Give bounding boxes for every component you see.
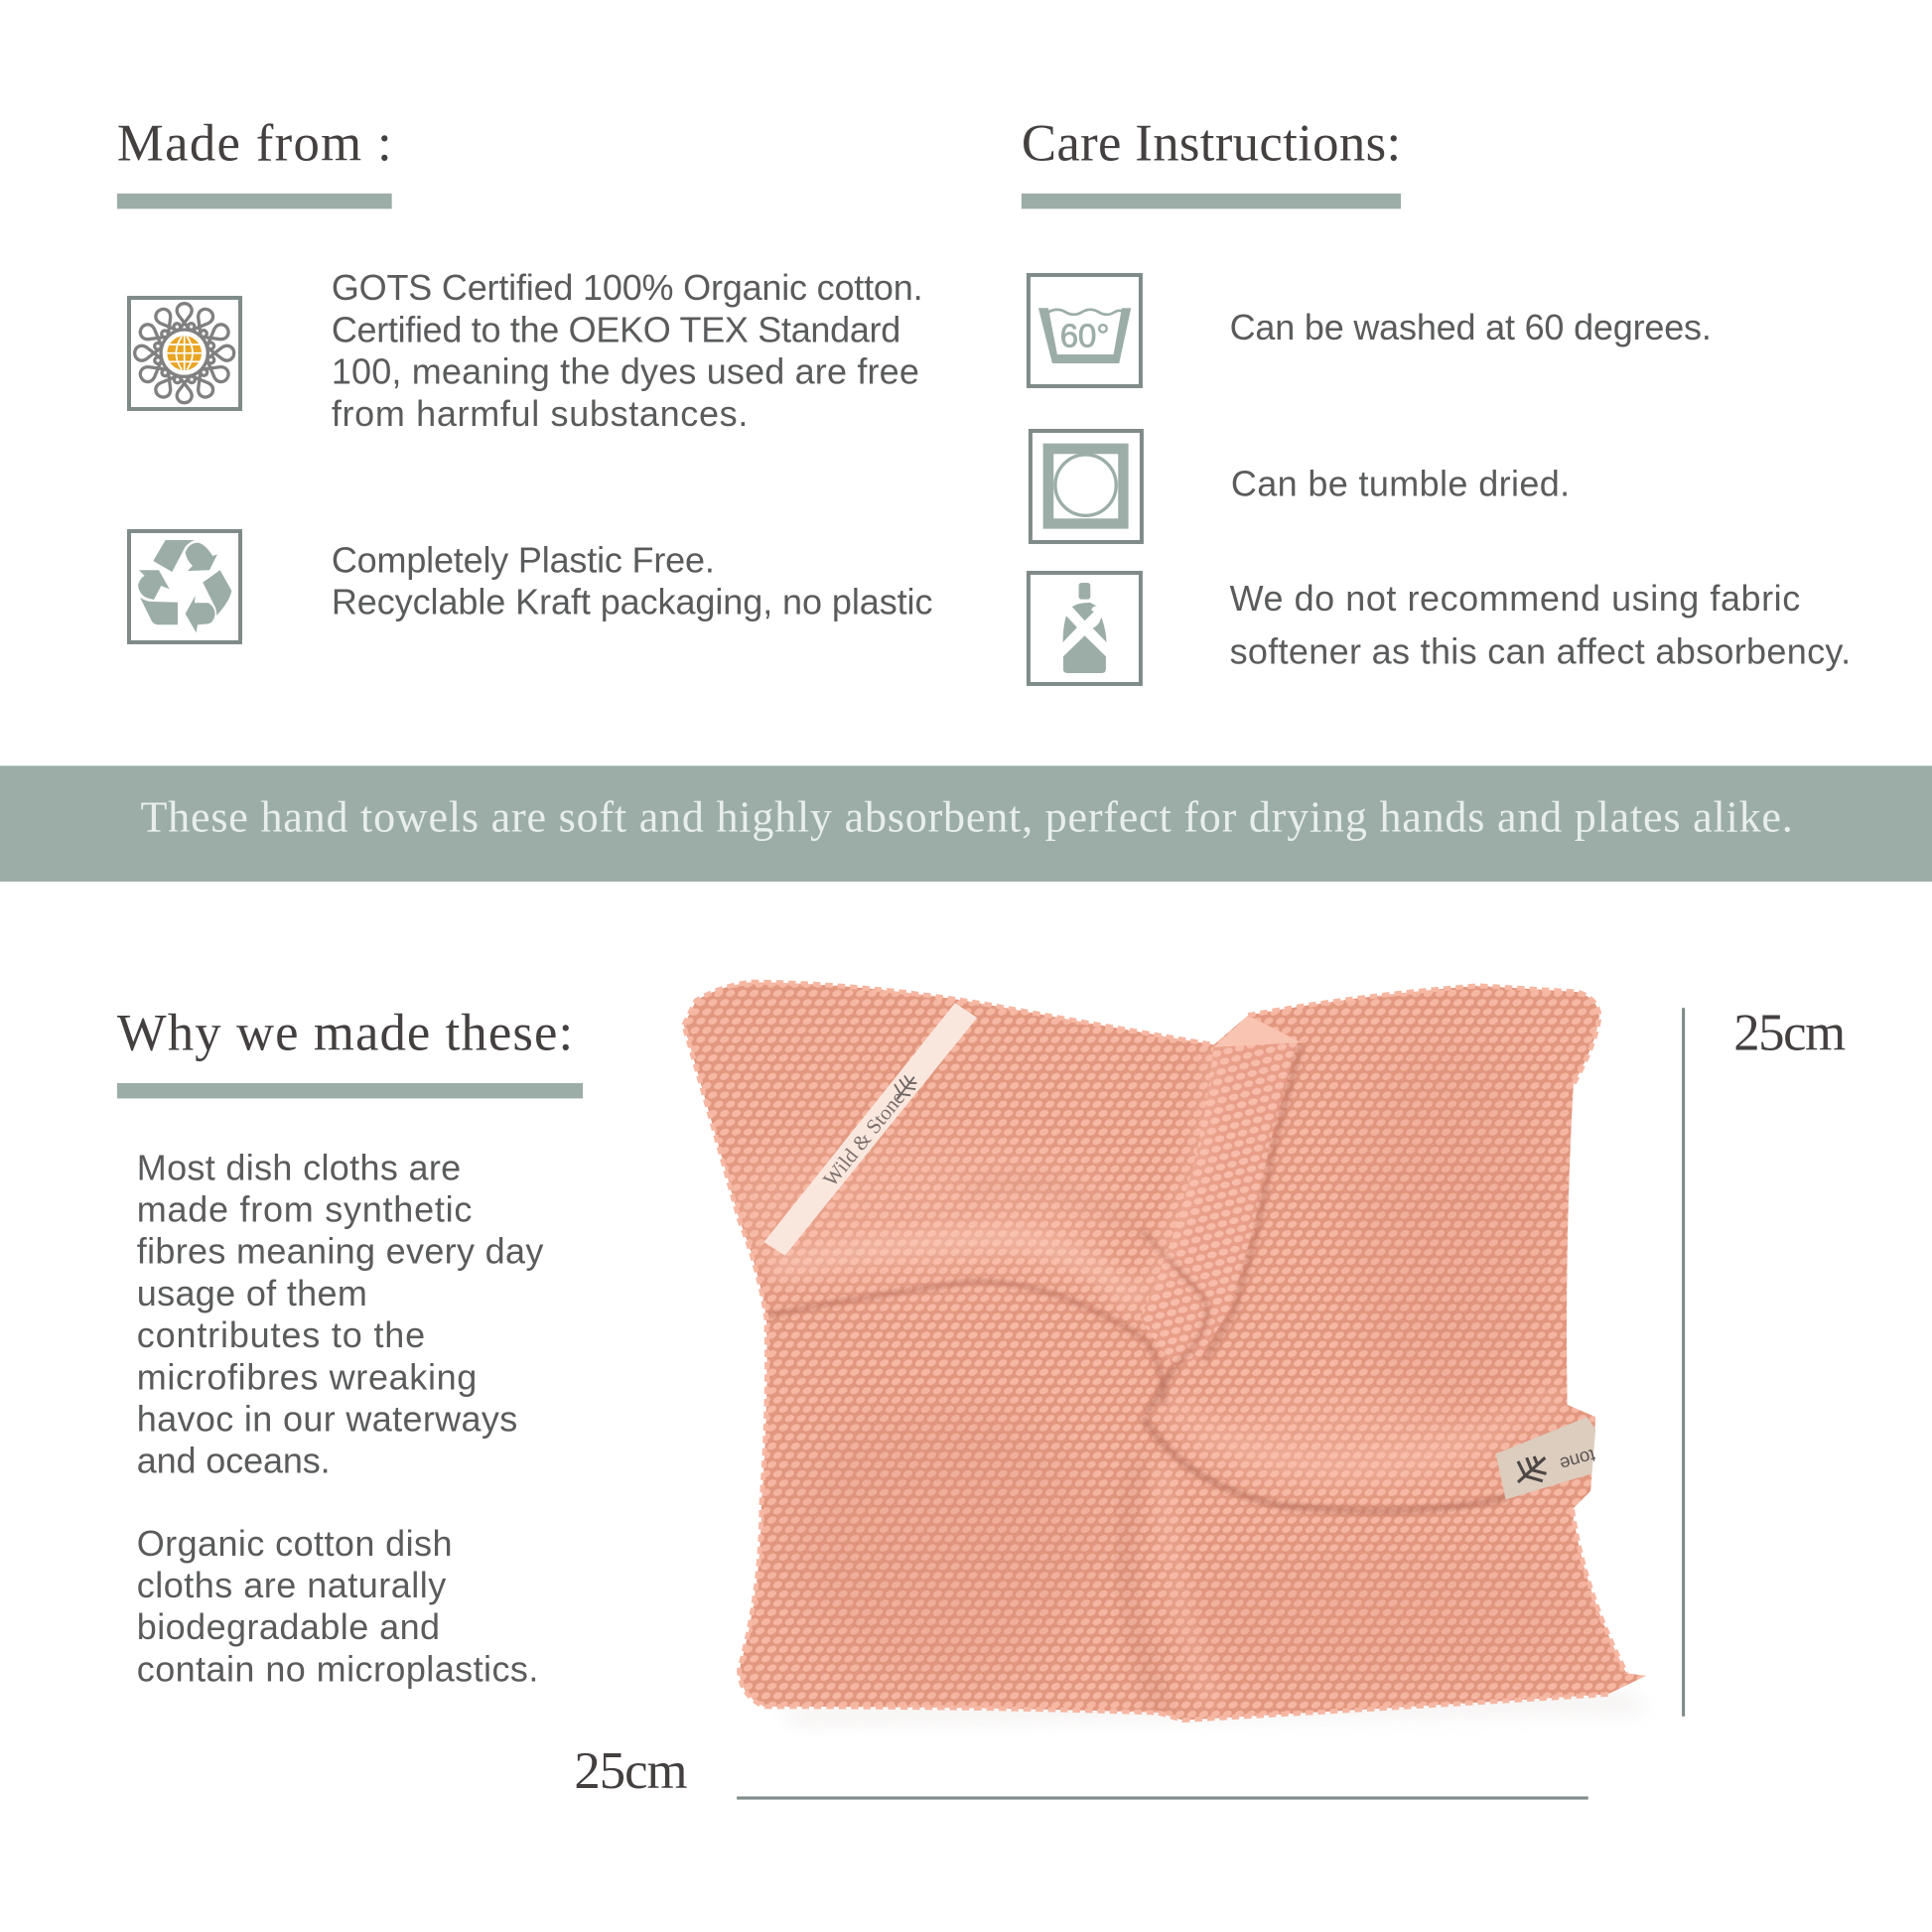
- text: certification: GOTS Certified 100% Organic cotton.: [332, 267, 923, 308]
- text: certification: 100, meaning the dyes used are free: [332, 351, 919, 392]
- icon: no fabric softener: [1029, 573, 1141, 684]
- icon: wash at 60 degrees: 60°: [1060, 318, 1110, 354]
- text: plastic free: Completely Plastic Free.: [332, 539, 715, 580]
- dimension: height: [1682, 1004, 1846, 1717]
- text: certification: from harmful substances.: [332, 393, 748, 434]
- text: wash: Can be washed at 60 degrees.: [1230, 307, 1712, 347]
- text: why we made these: usage of them: [137, 1273, 367, 1313]
- heading: Care Instructions: [1022, 114, 1401, 208]
- label: folded tag: [1496, 1417, 1597, 1499]
- heading: Care Instructions: Care Instructions:: [1022, 114, 1401, 172]
- text: fabric softener: softener as this can affect absorbency.: [1230, 630, 1851, 671]
- text: why we made these: Most dish cloths are: [137, 1147, 461, 1187]
- label: Wild & Stone: [763, 1003, 977, 1256]
- heading: Made from: [117, 114, 392, 208]
- text: tumble: Can be tumble dried.: [1231, 464, 1570, 504]
- label: Wild & Stone: Wild & Stone: [818, 1086, 909, 1191]
- icon: recycling: [129, 531, 240, 642]
- text: why we made these: cloths are naturally: [137, 1565, 446, 1605]
- text: fabric softener: [1230, 578, 1851, 671]
- text: why we made these: havoc in our waterways: [137, 1399, 517, 1440]
- dimension: width: [574, 1742, 1588, 1800]
- text: certification: [332, 267, 923, 434]
- text: why we made these: made from synthetic: [137, 1189, 472, 1230]
- text: why we made these: contributes to the: [137, 1314, 425, 1355]
- soft overall tone: [702, 1035, 1601, 1676]
- icon: tumble dry: [1031, 431, 1142, 542]
- label: folded tag: tone: [1558, 1446, 1597, 1475]
- icon: wash at 60 degrees: [1029, 275, 1141, 386]
- photo: knitted peach dish cloth: [665, 961, 1676, 1737]
- text: fabric softener: We do not recommend using fabric: [1230, 578, 1800, 619]
- text: why we made these: microfibres wreaking: [137, 1356, 477, 1397]
- text: why we made these: biodegradable and: [137, 1606, 440, 1647]
- text: certification: Certified to the OEKO TEX Standard: [332, 309, 900, 349]
- heading: Why we made these: [117, 1004, 583, 1098]
- banner: These hand towels are soft and highly absorbent, perfect for drying hands and plates alike.: [140, 793, 1793, 842]
- heading: Made from: Made from :: [117, 114, 392, 172]
- icon: GOTS organic certification: [129, 298, 240, 409]
- text: why we made these: and oceans.: [137, 1441, 331, 1481]
- banner: [0, 765, 1932, 882]
- dimension: width: 25cm: [574, 1742, 688, 1800]
- text: why we made these: contain no microplastics.: [137, 1648, 538, 1689]
- text: why we made these: Organic cotton dish: [137, 1523, 452, 1564]
- text: plastic free: Recyclable Kraft packaging, no plastic: [332, 582, 932, 622]
- text: why we made these: fibres meaning every day: [137, 1231, 543, 1272]
- heading: Why we made these: Why we made these:: [117, 1004, 573, 1061]
- dimension: height: 25cm: [1733, 1004, 1846, 1061]
- text: plastic free: [332, 539, 932, 622]
- text: why we made these: [137, 1147, 543, 1689]
